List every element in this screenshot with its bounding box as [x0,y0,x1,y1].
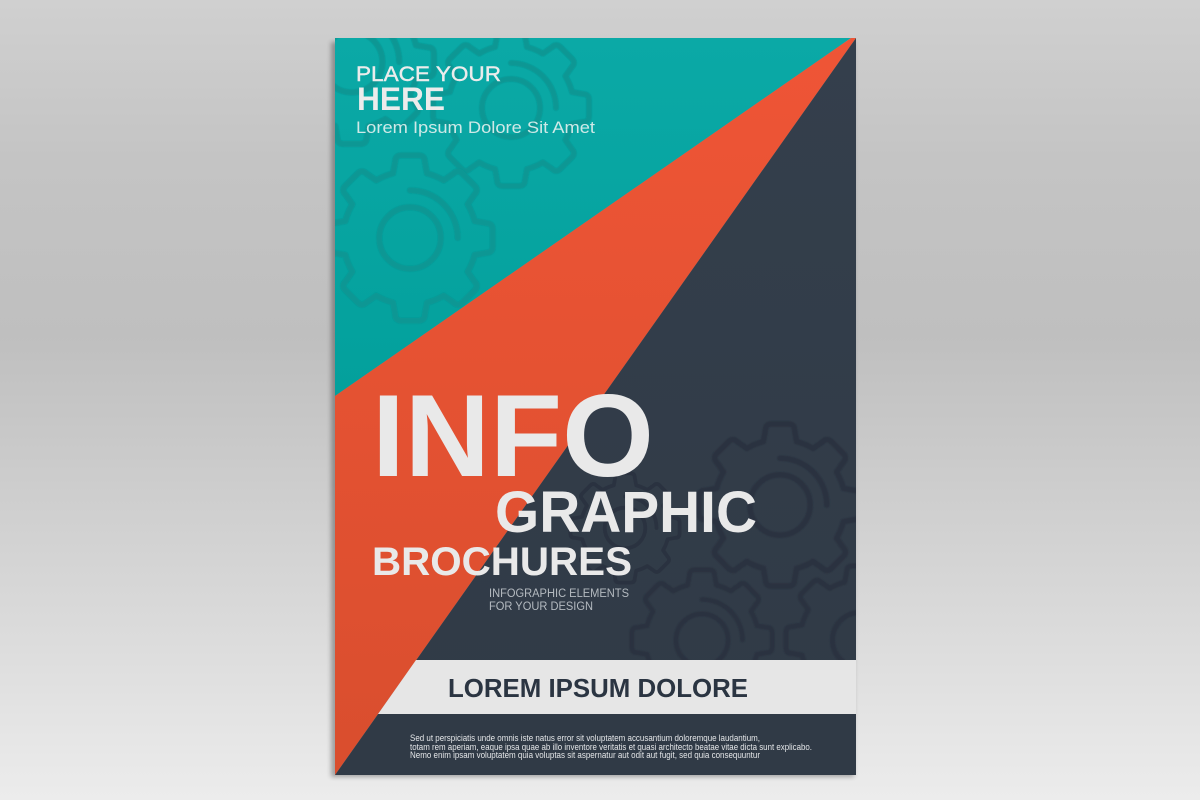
icons: teal gear watermarks [335,38,592,324]
heading: here: HERE [357,81,445,117]
poster shadow [331,42,854,777]
footer paragraph [410,733,812,760]
tagline [489,588,629,613]
tagline line 2: FOR YOUR DESIGN [489,601,593,613]
heading: place your: PLACE YOUR [356,63,501,86]
paragraph line 2: totam rem aperiam, eaque ipsa quae ab illo inventore veritatis et quasi architecto beatae vitae dicta sunt explicabo. [410,742,812,752]
panel: orange diagonal band [335,38,856,775]
poster [335,38,856,775]
header text block [356,63,595,137]
tagline line 1: INFOGRAPHIC ELEMENTS [489,588,629,600]
panel: teal triangle [335,38,851,396]
paragraph line 3: Nemo enim ipsam voluptatem quia voluptas sit aspernatur aut odit aut fugit, sed quia consequuntur [410,750,760,760]
banner heading: LOREM IPSUM DOLORE [448,675,748,703]
icons: dark gear watermarks [568,422,856,660]
light banner [378,660,856,714]
subheading: Lorem Ipsum Dolore Sit Amet [356,118,595,137]
paragraph line 1: Sed ut perspiciatis unde omnis iste natus error sit voluptatem accusantium doloremque laudantium, [410,733,760,743]
panel: dark triangle [335,38,856,775]
title: brochures: BROCHURES [372,540,632,584]
title: info: INFO [372,370,654,501]
title: graphic: GRAPHIC [495,480,757,545]
main title block [372,370,757,584]
